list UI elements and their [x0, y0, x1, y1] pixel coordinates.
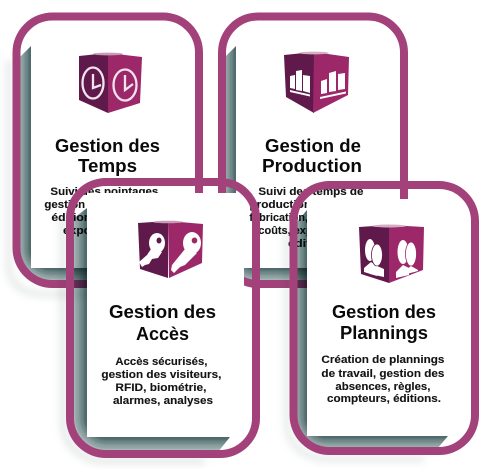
- title: Gestion des Plannings: Plannings: [340, 322, 428, 343]
- text: Production description: production, ordres de: [249, 199, 371, 211]
- icon: people cube: [359, 224, 424, 283]
- text: Temps description: éditions, analyses,: [51, 212, 159, 224]
- icon: clock cube: [79, 53, 142, 113]
- text: Accès description: alarmes, analyses: [113, 395, 213, 407]
- text: Production description: Suivi des temps de: [258, 186, 363, 198]
- panel: Gestion des Accès: [63, 182, 256, 461]
- icon: key cube: [138, 221, 203, 278]
- text: Temps description: exports de paie: [63, 225, 151, 237]
- text: Production description: éditions: [288, 238, 336, 250]
- text: Plannings description: de travail, gestion des: [321, 368, 444, 380]
- panel: Gestion des Plannings: [287, 185, 475, 459]
- title: Gestion des Temps: Temps: [78, 155, 137, 176]
- panel: Gestion des Temps: [9, 16, 199, 294]
- title: Gestion des Temps: Gestion des: [55, 135, 160, 156]
- text: Production description: coûts, exportations,: [258, 225, 362, 237]
- title: Gestion des Accès: Accès: [136, 323, 189, 344]
- title: Gestion de Production: Production: [262, 155, 362, 176]
- text: Accès description: Accès sécurisés,: [115, 356, 207, 368]
- text: Plannings description: Création de plannings: [321, 354, 444, 366]
- text: Temps description: gestion des absences,: [44, 199, 166, 211]
- title: Gestion de Production: Gestion de: [265, 135, 361, 156]
- panel: Gestion de Production: [222, 16, 404, 284]
- text: Production description: fabrication, gestion des: [249, 212, 371, 224]
- icon: bar chart cube: [284, 52, 349, 113]
- text: Temps description: Suivi des pointages,: [50, 186, 161, 198]
- text: Accès description: gestion des visiteurs,: [101, 369, 221, 381]
- text: Plannings description: compteurs, éditions.: [327, 393, 441, 405]
- title: Gestion des Accès: Gestion des: [109, 301, 216, 322]
- text: Plannings description: absences, règles,: [335, 381, 430, 393]
- title: Gestion des Plannings: Gestion des: [332, 301, 436, 322]
- text: Accès description: RFID, biométrie,: [115, 382, 206, 394]
